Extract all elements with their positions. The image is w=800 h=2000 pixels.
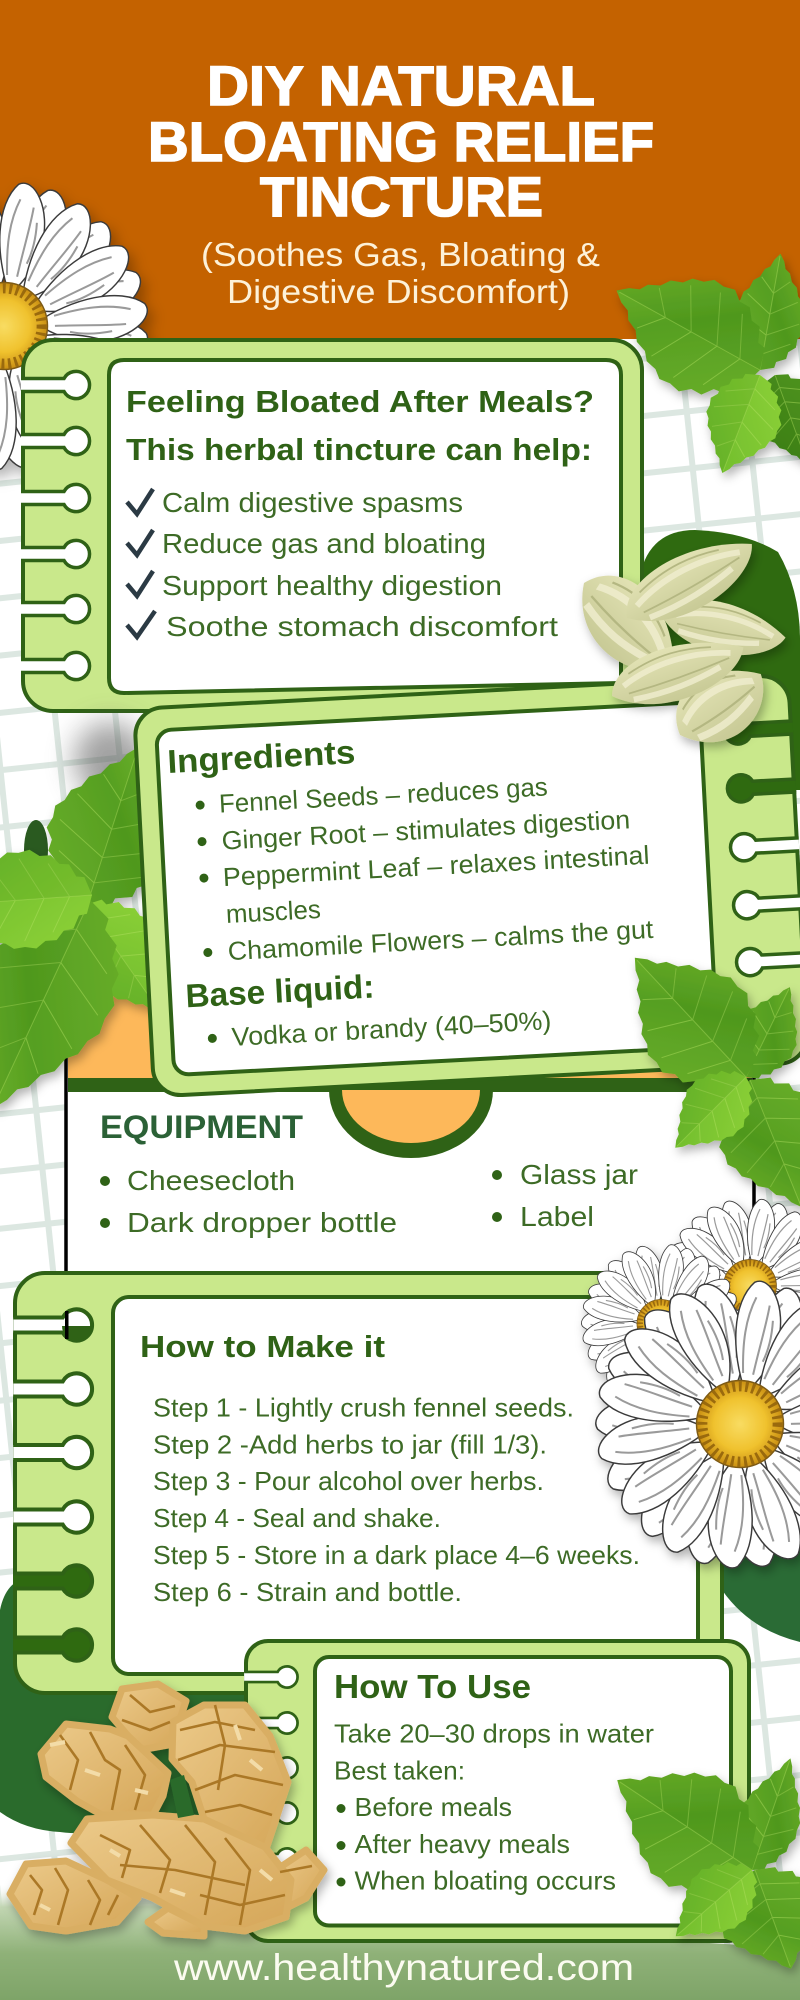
icon: ginger root xyxy=(10,1684,324,1936)
how to use heading: How To Use xyxy=(334,1668,531,1705)
usage text: When bloating occurs xyxy=(354,1866,616,1896)
title: DIY NATURAL xyxy=(207,54,595,117)
icon: chamomile flower cluster xyxy=(580,1198,800,1570)
benefits list: Soothe stomach discomfort xyxy=(166,611,558,642)
usage text: Before meals xyxy=(354,1792,512,1822)
benefits list: Reduce gas and bloating xyxy=(162,528,486,559)
spiral binding holes xyxy=(724,714,800,976)
benefits list: Support healthy digestion xyxy=(162,570,502,601)
semicircle tab xyxy=(329,1090,493,1158)
steps list: Step 1 - Lightly crush fennel seeds. xyxy=(153,1392,574,1422)
ingredients heading: Ingredients xyxy=(166,733,356,780)
spiral binding holes xyxy=(244,1666,298,1870)
green blob right of steps xyxy=(700,1540,800,1642)
panel: equipment xyxy=(66,983,754,1283)
equipment list xyxy=(100,1159,638,1238)
ginger cracks xyxy=(30,1695,312,1925)
steps list: Step 3 - Pour alcohol over herbs. xyxy=(153,1466,544,1496)
icon: mint cluster left xyxy=(0,728,198,1137)
panel: ingredients xyxy=(134,675,800,1096)
usage text: After heavy meals xyxy=(354,1829,570,1859)
inner white page xyxy=(113,1297,698,1674)
ingredients list: Ginger Root – stimulates digestion xyxy=(221,804,631,856)
check marks xyxy=(127,489,155,637)
ingredients list xyxy=(195,766,655,967)
ingredients list: Fennel Seeds – reduces gas xyxy=(218,771,548,819)
icon: mint cluster middle right xyxy=(592,918,800,1227)
ingredients list: Chamomile Flowers – calms the gut xyxy=(227,914,655,966)
footer url: www.healthynatured.com xyxy=(173,1947,634,1988)
benefits list: Calm digestive spasms xyxy=(162,487,463,518)
steps list xyxy=(153,1392,640,1607)
base liquid item: Vodka or brandy (40–50%) xyxy=(231,1005,552,1052)
header band xyxy=(0,0,800,339)
green blob behind ginger xyxy=(0,1577,260,1833)
subtitle: Digestive Discomfort) xyxy=(227,273,570,310)
inner white page xyxy=(156,702,717,1075)
equipment list: Label xyxy=(520,1201,594,1232)
icon: chamomile flower top left xyxy=(0,180,150,472)
soft shadow near ingredients card xyxy=(74,722,146,798)
equipment list: Dark dropper bottle xyxy=(127,1207,397,1238)
panel: how to make it xyxy=(13,1273,722,1693)
usage text xyxy=(334,1718,654,1896)
base liquid heading: Base liquid: xyxy=(185,968,375,1014)
equipment list: Cheesecloth xyxy=(127,1165,295,1196)
steps list: Step 4 - Seal and shake. xyxy=(153,1503,441,1533)
inner white page xyxy=(315,1657,731,1926)
subtitle: (Soothes Gas, Bloating & xyxy=(201,236,600,273)
steps list: Step 5 - Store in a dark place 4–6 weeks. xyxy=(153,1540,640,1570)
icon: fennel seeds xyxy=(561,523,790,761)
heading: Feeling Bloated After Meals? xyxy=(126,384,594,419)
usage text: Best taken: xyxy=(334,1756,465,1786)
usage text: Take 20–30 drops in water xyxy=(334,1718,654,1748)
panel: feeling bloated xyxy=(21,340,642,711)
heading xyxy=(126,384,594,467)
spiral binding holes xyxy=(21,371,90,680)
spiral binding holes xyxy=(13,1309,92,1661)
title: TINCTURE xyxy=(260,165,543,228)
heading: This herbal tincture can help: xyxy=(126,432,592,467)
hollow between lobes xyxy=(170,1775,194,1818)
subtitle xyxy=(201,236,600,310)
footer band background xyxy=(0,1884,800,2000)
panel: how to use xyxy=(244,1641,749,1941)
small dark shape behind left mint xyxy=(24,820,48,880)
benefits list xyxy=(162,487,558,642)
inner white page xyxy=(109,360,621,693)
ingredients list: muscles xyxy=(225,894,322,929)
how to make heading: How to Make it xyxy=(140,1329,385,1364)
steps list: Step 6 - Strain and bottle. xyxy=(153,1577,462,1607)
steps list: Step 2 -Add herbs to jar (fill 1/3). xyxy=(153,1430,547,1460)
icon: mint cluster bottom right xyxy=(584,1730,800,1987)
title: BLOATING RELIEF xyxy=(148,110,654,173)
equipment list: Glass jar xyxy=(520,1159,638,1190)
green blob behind fennel xyxy=(640,530,800,790)
ingredients list: Peppermint Leaf – relaxes intestinal xyxy=(222,840,650,892)
equipment heading: EQUIPMENT xyxy=(100,1109,303,1145)
icon: mint cluster top right xyxy=(588,240,800,487)
title xyxy=(148,54,654,228)
